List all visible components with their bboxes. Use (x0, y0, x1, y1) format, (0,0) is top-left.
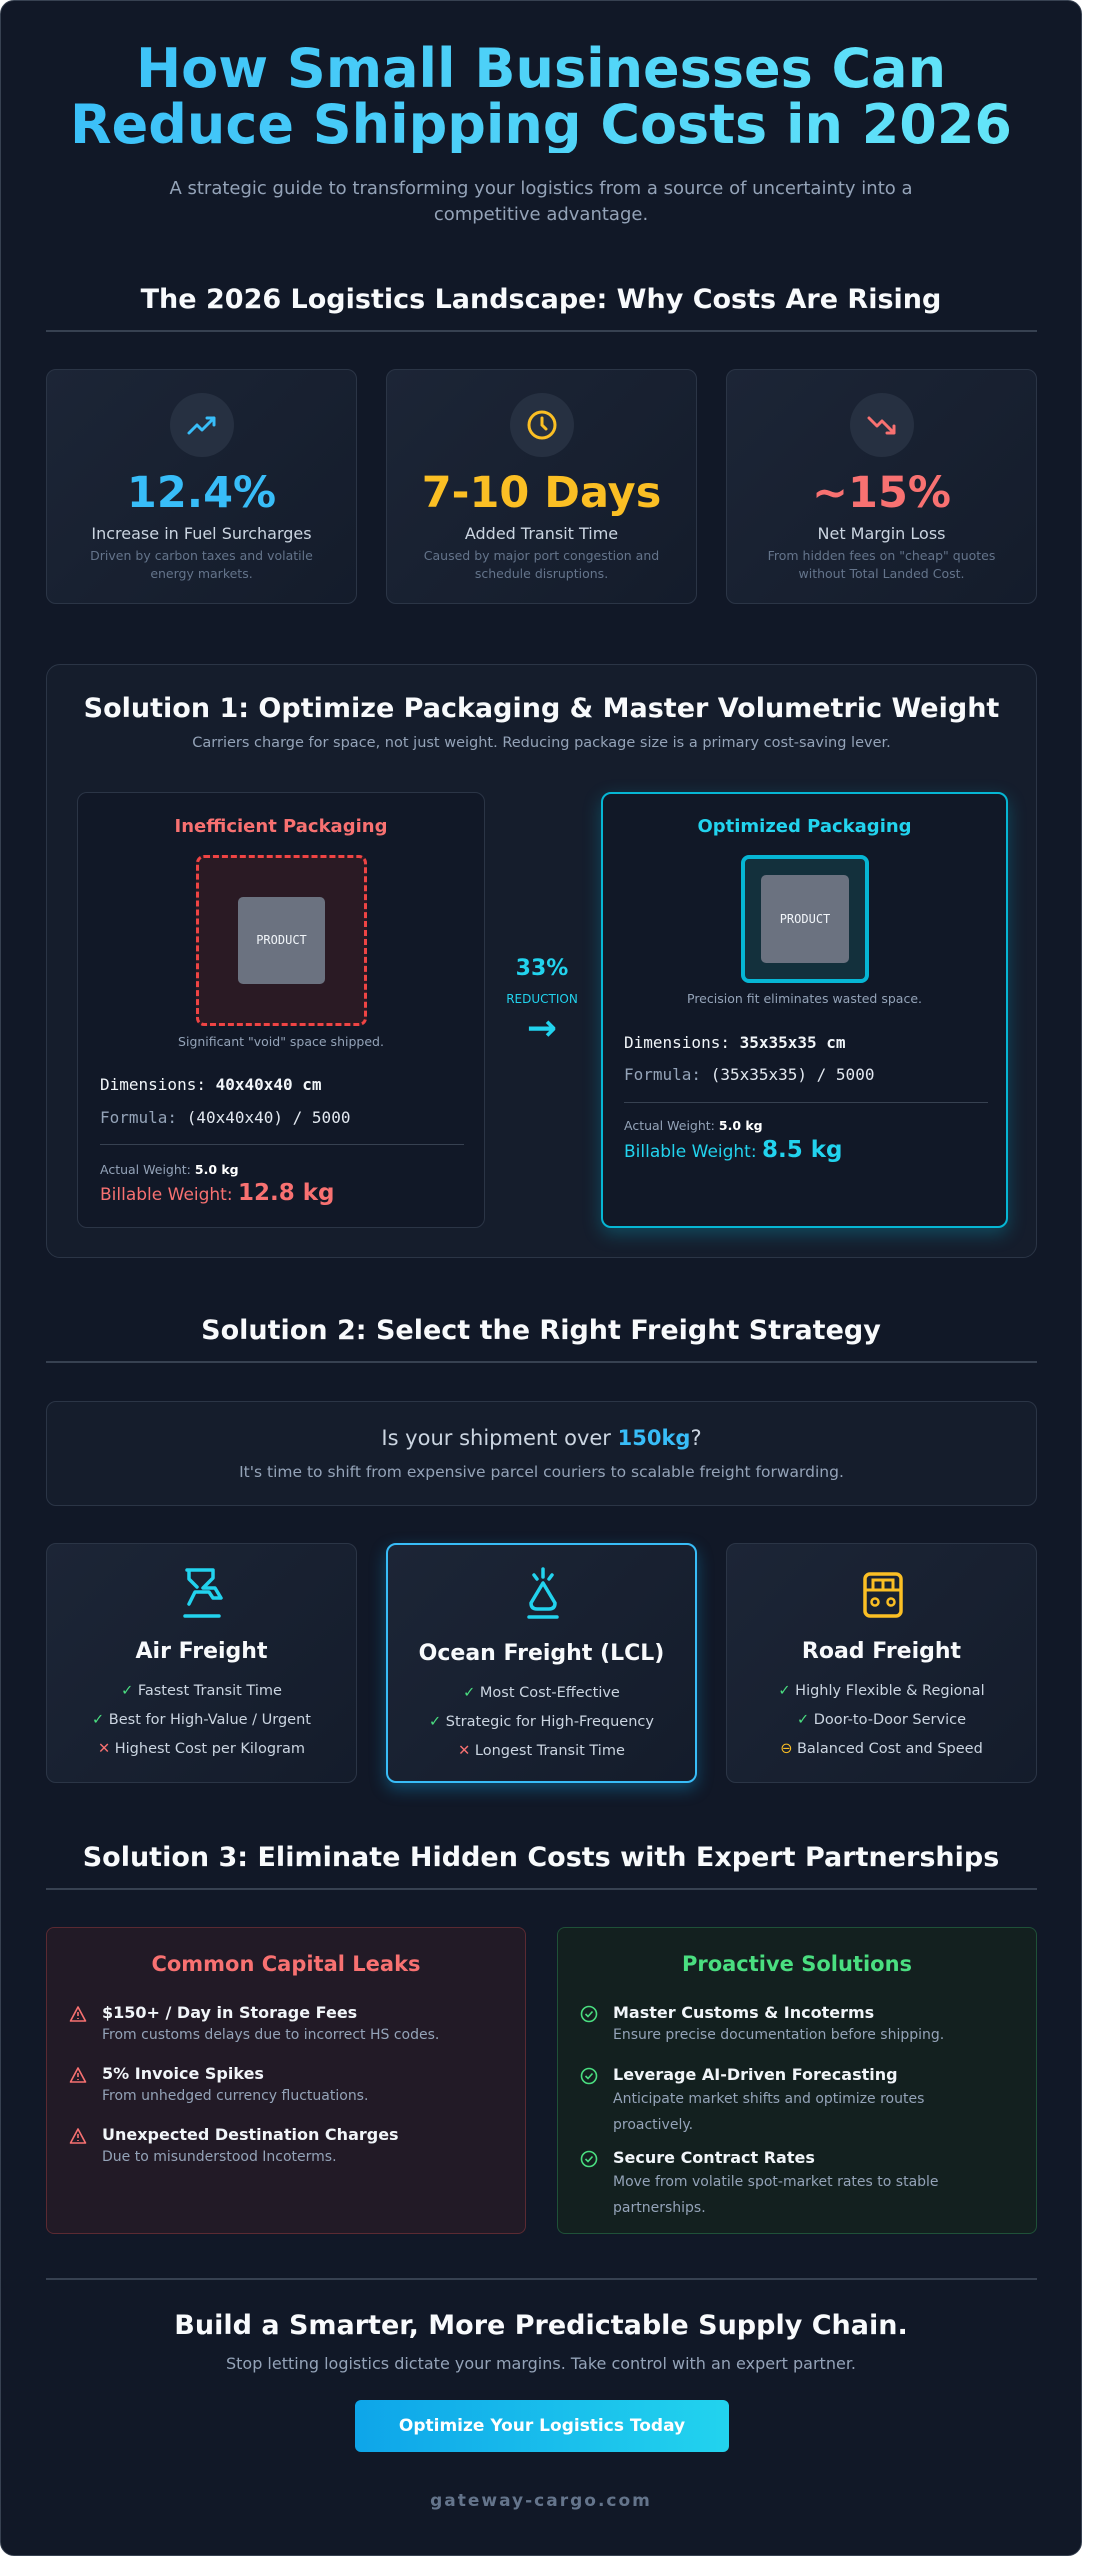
card: optimized (601, 792, 1008, 1228)
text: Stop letting logistics dictate your margins. Take control with an expert partner. (226, 2354, 856, 2373)
card: road freight: ✓ Door-to-Door Service (797, 1712, 966, 1728)
card: inefficient: Formula: (40x40x40) / 5000 (100, 1108, 350, 1127)
panel: proactive solutions: Proactive Solutions (682, 1952, 912, 1976)
icon: fitted box (741, 855, 869, 983)
stat label: Increase in Fuel Surcharges (91, 524, 312, 543)
stat label: Added Transit Time (465, 524, 618, 543)
card: optimized: Actual Weight: 5.0 kg (624, 1118, 763, 1133)
card: inefficient: Significant "void" space shipped. (178, 1034, 384, 1049)
item: destination charges (70, 2125, 399, 2165)
card: ocean freight (386, 1543, 697, 1783)
stat value: ~15% (812, 468, 951, 518)
icon: plane (183, 1568, 223, 1618)
icon: oversized box: PRODUCT (256, 933, 307, 947)
title: Reduce Shipping Costs in 2026 (70, 93, 1012, 156)
card: ocean freight: ✓ Strategic for High-Frequency (429, 1714, 654, 1730)
heading: solution 1: Solution 1: Optimize Packaging & Master Volumetric Weight (84, 693, 999, 724)
heading: solution 3: Solution 3: Eliminate Hidden Costs with Expert Partnerships (83, 1842, 999, 1873)
card: road freight (726, 1543, 1037, 1783)
stat card: fuel: Driven by carbon taxes and volatile energy markets. (90, 548, 313, 581)
footer: gateway-cargo.com (430, 2491, 652, 2511)
heading: landscape: The 2026 Logistics Landscape: Why Costs Are Rising (141, 284, 941, 315)
icon: oversized box (196, 855, 367, 1026)
item: customs: Ensure precise documentation before shipping. (613, 2027, 944, 2043)
card: optimized: Formula: (35x35x35) / 5000 (624, 1065, 874, 1084)
item: customs (580, 2003, 944, 2043)
item: contract rates: Secure Contract Rates (613, 2148, 815, 2167)
title: How Small Businesses Can (136, 37, 946, 100)
card: inefficient: Inefficient Packaging (175, 816, 387, 837)
stat card: fuel (46, 369, 357, 604)
heading: solution 2: Solution 2: Select the Right Freight Strategy (201, 1315, 881, 1346)
stat card: transit: Caused by major port congestion and schedule disruptions. (424, 548, 659, 581)
item: contract rates: Move from volatile spot-market rates to stable partnerships. (613, 2174, 939, 2216)
icon: truck (863, 1572, 903, 1618)
card: optimized: Dimensions: 35x35x35 cm (624, 1033, 846, 1052)
card: road freight: Road Freight (802, 1639, 961, 1664)
title (1, 41, 1081, 153)
card: ocean freight: Ocean Freight (LCL) (419, 1641, 664, 1666)
item: contract rates (580, 2148, 939, 2216)
item: forecasting: Anticipate market shifts and optimize routes proactively. (613, 2091, 924, 2133)
button: CTA: Optimize Your Logistics Today (399, 2416, 685, 2436)
card: road freight: ✓ Highly Flexible & Regional (778, 1683, 985, 1699)
item: storage fees: From customs delays due to incorrect HS codes. (102, 2027, 439, 2043)
item: invoice spikes: From unhedged currency fluctuations. (102, 2088, 368, 2104)
callout: 150kg question: Is your shipment over 150kg? (381, 1426, 702, 1450)
card: optimized: Precision fit eliminates wasted space. (687, 991, 922, 1006)
panel: capital leaks (46, 1927, 526, 2234)
stat card: margin: From hidden fees on "cheap" quotes without Total Landed Cost. (768, 548, 995, 581)
panel: proactive solutions (557, 1927, 1037, 2234)
card: inefficient (77, 792, 485, 1228)
callout: 150kg question (46, 1401, 1037, 1506)
callout: reduction arrow (506, 956, 578, 1049)
item: forecasting: Leverage AI-Driven Forecasting (613, 2065, 898, 2084)
card: optimized: Billable Weight: 8.5 kg (624, 1137, 842, 1163)
panel: solution 1 (46, 664, 1037, 1258)
stat card: margin (726, 369, 1037, 604)
card: ocean freight: ✕ Longest Transit Time (458, 1743, 625, 1759)
card: inefficient: Billable Weight: 12.8 kg (100, 1180, 334, 1206)
icon: fitted box: PRODUCT (780, 912, 830, 926)
heading: call to action: Build a Smarter, More Predictable Supply Chain. (174, 2310, 908, 2341)
item: customs: Master Customs & Incoterms (613, 2003, 874, 2022)
item: invoice spikes (70, 2064, 368, 2104)
callout: reduction arrow: REDUCTION (506, 992, 578, 1006)
item: forecasting (580, 2065, 924, 2133)
item: invoice spikes: 5% Invoice Spikes (102, 2064, 264, 2083)
icon: clock (510, 393, 574, 457)
card: inefficient: Dimensions: 40x40x40 cm (100, 1075, 322, 1094)
card: optimized: Optimized Packaging (697, 816, 912, 837)
card: inefficient: Actual Weight: 5.0 kg (100, 1162, 239, 1177)
card: road freight: ⊖ Balanced Cost and Speed (780, 1741, 983, 1757)
callout: 150kg question: It's time to shift from expensive parcel couriers to scalable freight forwarding. (239, 1463, 844, 1481)
item: destination charges: Unexpected Destination Charges (102, 2125, 399, 2144)
panel: solution 1: Carriers charge for space, not just weight. Reducing package size is a primary cost-saving lever. (192, 735, 891, 751)
icon: trend down (850, 393, 914, 457)
stat value: 7-10 Days (422, 468, 661, 518)
stat value: 12.4% (127, 468, 276, 518)
card: air freight: Air Freight (136, 1639, 267, 1664)
card: air freight (46, 1543, 357, 1783)
card: air freight: ✓ Fastest Transit Time (121, 1683, 282, 1699)
subtitle: A strategic guide to transforming your logistics from a source of uncertainty into a competitive advantage. (169, 178, 913, 225)
callout: reduction arrow: → (527, 1008, 557, 1049)
item: destination charges: Due to misunderstood Incoterms. (102, 2149, 337, 2165)
stat label: Net Margin Loss (818, 524, 946, 543)
item: storage fees: $150+ / Day in Storage Fees (102, 2003, 357, 2022)
item: storage fees (70, 2003, 439, 2043)
card: air freight: ✓ Best for High-Value / Urgent (92, 1712, 311, 1728)
icon: trend up (170, 393, 234, 457)
callout: reduction arrow: 33% (516, 956, 568, 981)
icon: ship (527, 1567, 559, 1619)
card: air freight: ✕ Highest Cost per Kilogram (98, 1741, 305, 1757)
card: ocean freight: ✓ Most Cost-Effective (463, 1685, 620, 1701)
button: CTA (355, 2400, 729, 2452)
stat card: transit (386, 369, 697, 604)
panel: capital leaks: Common Capital Leaks (151, 1952, 421, 1976)
